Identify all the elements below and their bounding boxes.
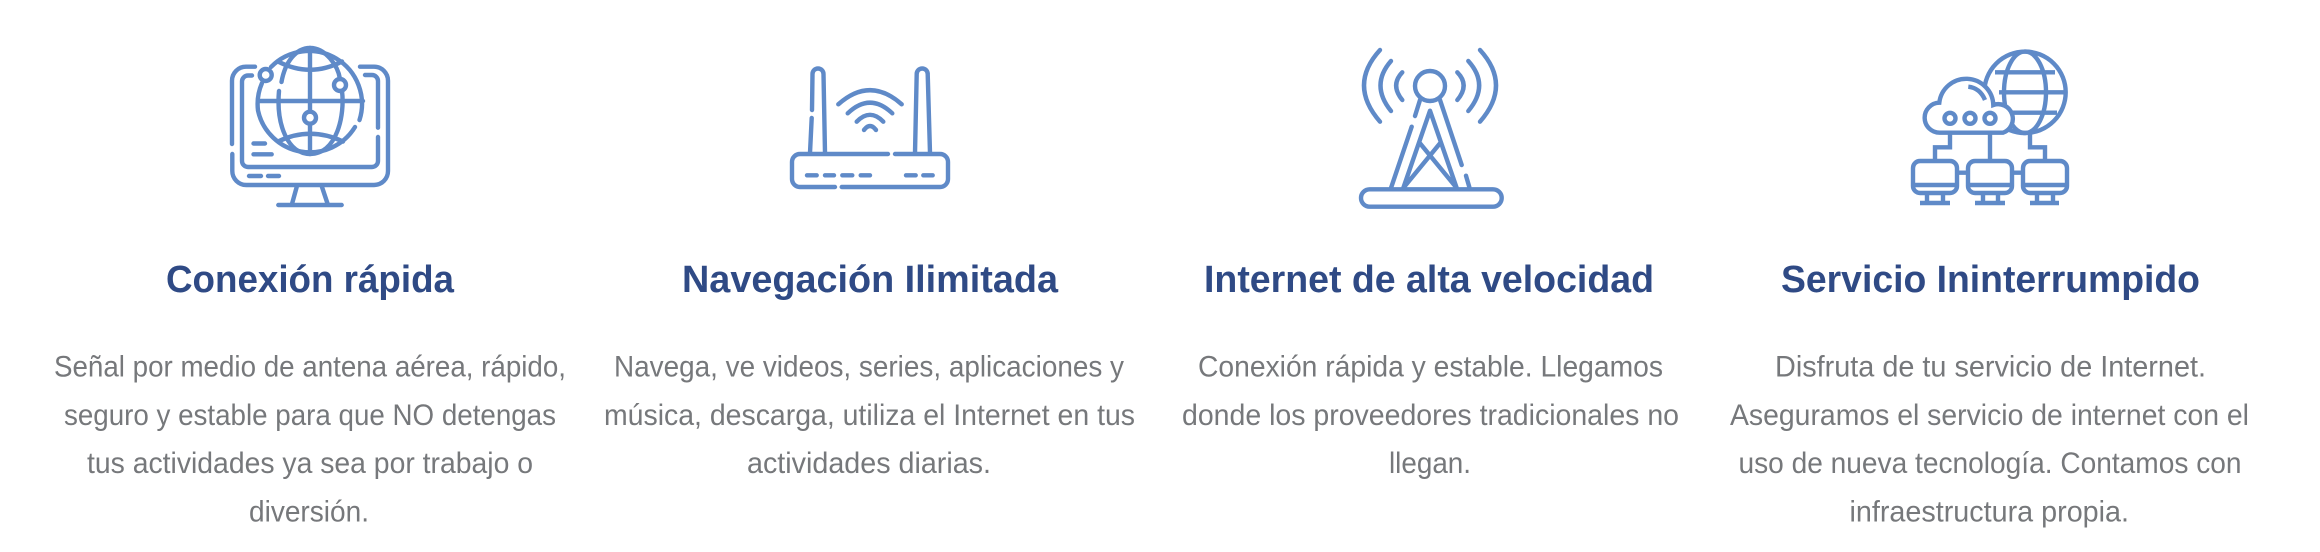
text block: Navegación Ilimitada description: actividades diarias. bbox=[747, 447, 991, 480]
text block: Internet de alta velocidad description: Conexión rápida y estable. Llegamos bbox=[1198, 351, 1663, 384]
text block: Conexión rápida description bbox=[54, 351, 566, 529]
text block: Servicio Ininterrumpido description bbox=[1730, 351, 2249, 529]
text block: Servicio Ininterrumpido description: Aseguramos el servicio de internet con el bbox=[1730, 399, 2249, 432]
icon: cloud, globe and network bbox=[1913, 52, 2067, 203]
text block: Internet de alta velocidad description bbox=[1182, 351, 1679, 480]
text block: Servicio Ininterrumpido description: uso de nueva tecnología. Contamos con bbox=[1738, 447, 2242, 480]
heading: Internet de alta velocidad: Internet de alta velocidad bbox=[1204, 259, 1654, 301]
text block: Conexión rápida description: Señal por medio de antena aérea, rápido, bbox=[54, 351, 566, 384]
panel: Internet de alta velocidad bbox=[1182, 50, 1679, 480]
heading: Navegación Ilimitada: Navegación Ilimitada bbox=[682, 259, 1059, 301]
heading: Conexión rápida: Conexión rápida bbox=[166, 259, 455, 301]
text block: Internet de alta velocidad description: donde los proveedores tradicionales no bbox=[1182, 399, 1679, 432]
text block: Conexión rápida description: seguro y estable para que NO detengas bbox=[64, 399, 556, 432]
text block: Conexión rápida description: diversión. bbox=[249, 496, 369, 529]
text block: Navegación Ilimitada description: música, descarga, utiliza el Internet en tus bbox=[604, 399, 1135, 432]
icon: antenna tower bbox=[1361, 50, 1502, 207]
panel: Servicio Ininterrumpido bbox=[1730, 52, 2249, 529]
text block: Conexión rápida description: tus actividades ya sea por trabajo o bbox=[87, 447, 533, 480]
text block: Servicio Ininterrumpido description: Disfruta de tu servicio de Internet. bbox=[1775, 351, 2206, 384]
panel: Navegación Ilimitada bbox=[604, 68, 1135, 480]
text block: Navegación Ilimitada description bbox=[604, 351, 1135, 480]
icon: monitor with globe bbox=[232, 48, 388, 205]
text block: Servicio Ininterrumpido description: infraestructura propia. bbox=[1850, 496, 2129, 529]
text block: Internet de alta velocidad description: llegan. bbox=[1389, 447, 1471, 480]
icon: wifi router bbox=[792, 68, 948, 187]
panel: Conexión rápida bbox=[54, 48, 566, 529]
text block: Navegación Ilimitada description: Navega, ve videos, series, aplicaciones y bbox=[614, 351, 1124, 384]
heading: Servicio Ininterrumpido: Servicio Ininterrumpido bbox=[1781, 259, 2200, 301]
